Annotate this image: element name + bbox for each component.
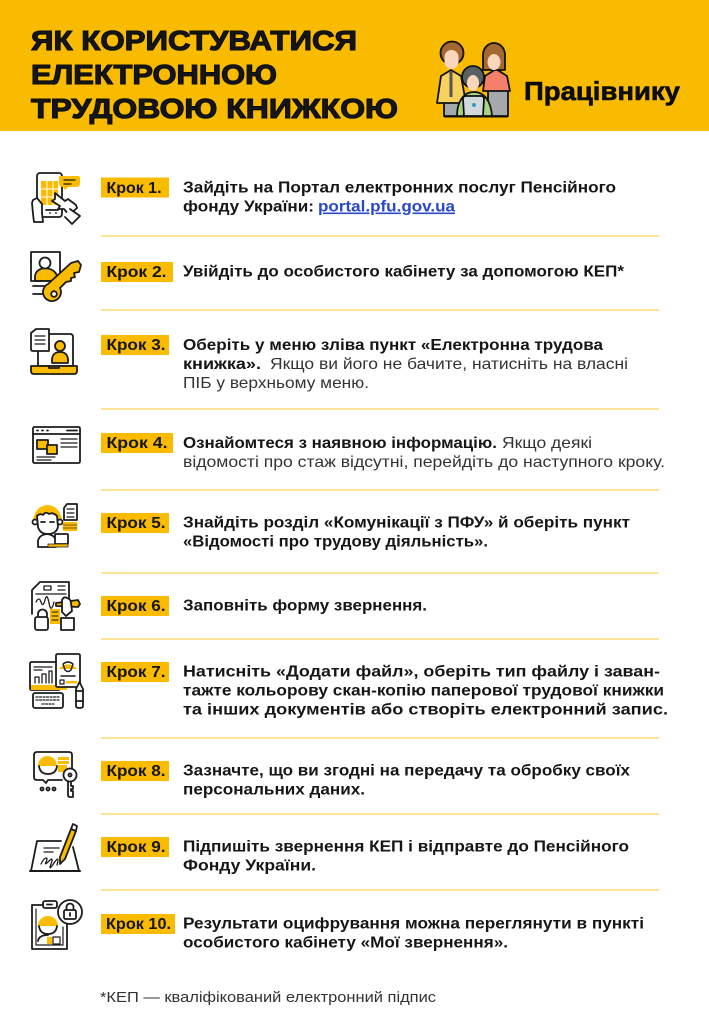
icon: monitor, poster and keyboard: [30, 654, 83, 708]
step text: [183, 838, 629, 874]
badge: [101, 513, 169, 533]
title: [31, 25, 398, 124]
step text: Оберіть у меню зліва пункт «Електронна трудова: [183, 337, 603, 354]
badge: [101, 662, 169, 682]
footnote: *КЕП — кваліфікований електронний підпис: [100, 989, 437, 1006]
icon: signature and pen: [30, 824, 80, 871]
icon: browser window: [33, 427, 80, 463]
step text: фонду України:: [183, 198, 314, 216]
label: Працівнику: Працівнику: [524, 76, 681, 106]
step text: Якщо ви його не бачите, натисніть на власні: [270, 356, 628, 373]
step 5: [32, 504, 630, 550]
step text: відомості про стаж відсутні, перейдіть до наступного кроку.: [183, 454, 665, 471]
badge: [101, 837, 169, 857]
step text: [183, 337, 628, 392]
badge: Крок 9.: [106, 839, 166, 856]
step text: [183, 514, 630, 550]
step text: Ознайомтеся з наявною інформацію.: [183, 435, 497, 452]
header band: [0, 0, 709, 131]
step text: Якщо деякі: [502, 435, 592, 452]
step text: тажте кольорову скан-копію паперової трудової книжки: [183, 682, 664, 700]
icon: ID card and key: [34, 752, 76, 797]
step 1: [32, 173, 616, 224]
step 9: [30, 824, 629, 874]
step text: [183, 762, 630, 798]
step text: особистого кабінету «Мої звернення».: [183, 934, 508, 952]
badge: [101, 433, 173, 453]
step text: Знайдіть розділ «Комунікації з ПФУ» й оберіть пункт: [183, 514, 630, 532]
step text: «Відомості про трудову діяльність».: [183, 534, 488, 550]
step 7: [30, 654, 668, 718]
step text: Результати оцифрування можна переглянути в пункті: [183, 916, 644, 932]
badge: [101, 761, 169, 781]
badge: Крок 7.: [106, 664, 166, 681]
step text: Зазначте, що ви згодні на передачу та обробку своїх: [183, 762, 630, 780]
step text: Підпишіть звернення КЕП і відправте до Пенсійного: [183, 838, 629, 856]
step text: Зайдіть на Портал електронних послуг Пенсійного: [183, 180, 616, 196]
step text: Увійдіть до особистого кабінету за допомогою КЕП*: [183, 264, 625, 280]
icon: worker with laptop: [32, 504, 77, 547]
icon: form with lock and pen: [32, 582, 80, 630]
title: ТРУДОВОЮ КНИЖКОЮ: [31, 93, 398, 124]
badge: [101, 178, 169, 198]
icon: document with lock: [32, 900, 82, 949]
badge: Крок 2.: [106, 264, 166, 281]
badge: [101, 596, 169, 616]
step 3: [31, 329, 628, 392]
step text: [183, 435, 665, 471]
step text: книжка».: [183, 356, 261, 373]
step 4: [33, 427, 665, 471]
badge: Крок 8.: [106, 763, 166, 780]
badge: Крок 1.: [106, 180, 162, 197]
badge: [101, 262, 173, 282]
badge: Крок 10.: [106, 916, 171, 933]
step text: та інших документів або створіть електронний запис.: [183, 702, 668, 718]
icon: three workers: [437, 42, 510, 116]
step text: Фонду України.: [183, 858, 316, 874]
badge: [101, 335, 169, 355]
step text: [183, 916, 644, 952]
step text: ПІБ у верхньому меню.: [183, 375, 369, 392]
title: ЕЛЕКТРОННОЮ: [31, 59, 277, 90]
step text: [183, 664, 668, 718]
badge: Крок 4.: [106, 435, 168, 452]
step text: персональних даних.: [183, 782, 365, 798]
step 6: [32, 582, 427, 630]
step text: [183, 180, 616, 216]
badge: Крок 6.: [106, 598, 166, 615]
step text: Заповніть форму звернення.: [183, 598, 427, 614]
icon: phone and hand: [32, 173, 80, 224]
step 8: [34, 752, 630, 798]
badge: Крок 3.: [106, 337, 166, 354]
title: ЯК КОРИСТУВАТИСЯ: [31, 25, 357, 56]
step text: portal.pfu.gov.ua: [318, 198, 455, 216]
icon: profile and key: [31, 252, 81, 301]
icon: laptop with document: [31, 329, 77, 374]
step text: Натисніть «Додати файл», оберіть тип файлу і заван-: [183, 664, 660, 680]
step 2: [31, 252, 625, 301]
badge: Крок 5.: [106, 515, 166, 532]
step 10: [32, 900, 644, 952]
